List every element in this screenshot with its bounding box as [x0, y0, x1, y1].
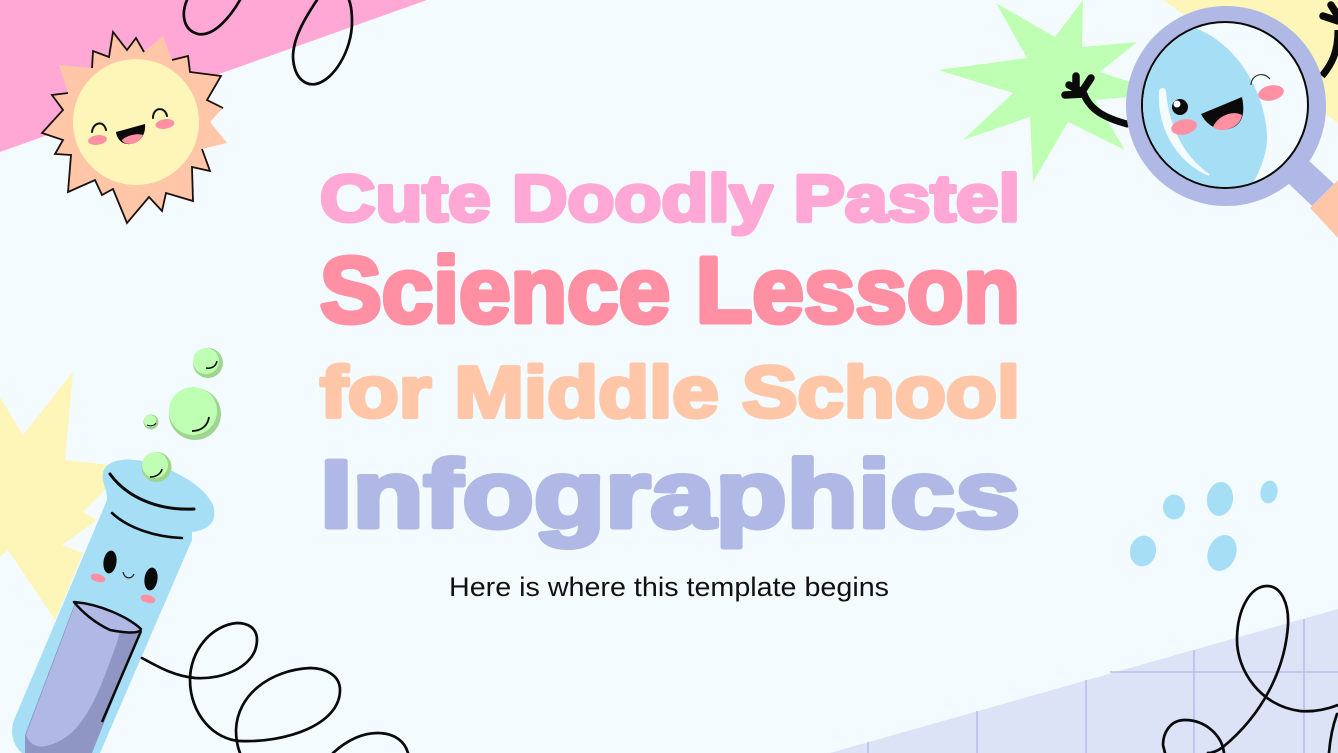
pink corner band — [0, 0, 427, 152]
title — [320, 161, 1020, 548]
green bubbles — [144, 348, 223, 440]
title line 1: Cute Doodly Pastel — [320, 161, 1020, 235]
top squiggle — [184, 0, 352, 84]
tube rim — [103, 460, 214, 541]
tube face — [90, 550, 159, 605]
green starburst — [938, 0, 1137, 182]
title line 2: Science Lesson — [320, 238, 1020, 342]
magnifier arms — [1065, 5, 1338, 124]
blue droplets — [1127, 479, 1279, 575]
icon: smiling sun — [42, 32, 227, 223]
hand — [1310, 180, 1338, 238]
bottom right grid panel — [830, 609, 1338, 753]
title line 4: Infographics — [320, 441, 1020, 548]
tube body — [12, 500, 192, 753]
tube liquid — [25, 602, 141, 753]
icon: magnifying glass character — [1065, 5, 1338, 238]
magnifier ring — [1126, 6, 1326, 206]
icon: yellow starburst — [0, 372, 110, 620]
magnifier handle — [1288, 158, 1334, 206]
water drop face — [1143, 28, 1284, 187]
lower left squiggle — [142, 623, 408, 753]
icon: test tube character — [12, 452, 214, 753]
bubble at rim — [142, 452, 172, 482]
subtitle: Here is where this template begins — [449, 572, 889, 602]
title line 3: for Middle School — [320, 353, 1020, 433]
lower right squiggle — [1163, 586, 1338, 753]
yellow shape top right — [1163, 0, 1338, 123]
